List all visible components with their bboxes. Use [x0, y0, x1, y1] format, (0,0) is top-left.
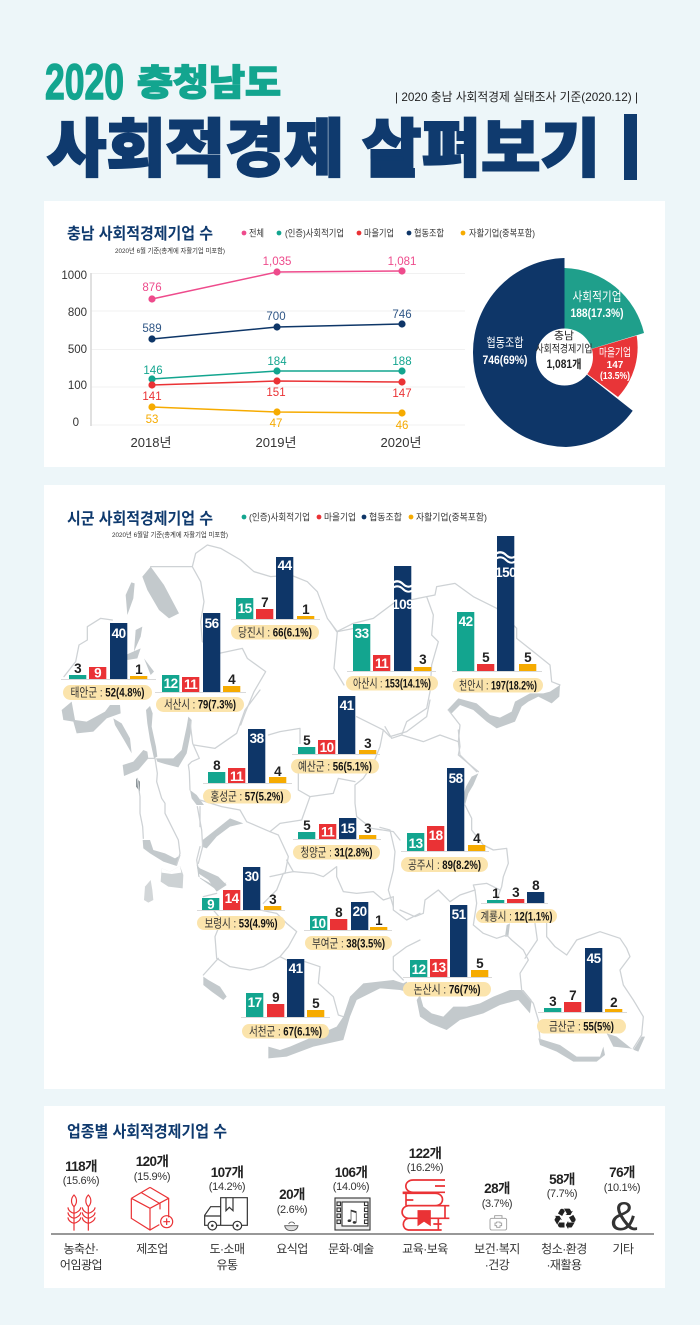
bars: 18 [429, 828, 444, 843]
category label [474, 1242, 520, 1272]
y axis labels: 800 [68, 307, 87, 319]
legend [242, 512, 487, 524]
bars [410, 905, 488, 977]
bars: 40 [112, 626, 126, 641]
bars: 3 [74, 661, 82, 676]
title line 2: 사회적경제 살펴보기 [47, 115, 636, 185]
district: 공주시 [401, 768, 489, 872]
district: 금산군 [537, 948, 627, 1034]
icon: wheat [68, 1195, 95, 1231]
y axis labels: 500 [68, 344, 87, 356]
label pill: 당진시 : 66(6.1%) [238, 626, 312, 640]
pie center label: 충남 [554, 330, 574, 342]
category: 교육·보육 [402, 1146, 449, 1256]
category label: 제조업 [136, 1242, 168, 1256]
bars: 8 [213, 758, 221, 773]
category: 요식업: 20개 [279, 1187, 305, 1202]
series: 자활기업: 53 [146, 414, 158, 426]
bars: 3 [364, 736, 372, 751]
pie chart [473, 258, 644, 447]
series: 자활기업: 47 [270, 418, 282, 430]
category label: 도·소매 [209, 1242, 245, 1256]
category: 도·소매 유통 [205, 1165, 247, 1272]
category label [209, 1242, 245, 1272]
series: 전체: 1,081 [388, 256, 416, 268]
category: 제조업 [131, 1154, 173, 1256]
pie label: 마을기업 [599, 346, 631, 382]
pie label: 마을기업: (13.5%) [600, 371, 630, 382]
label pill: 계룡시 : 12(1.1%) [480, 910, 552, 924]
category label: 농축산· [63, 1242, 99, 1256]
bars: 11 [184, 677, 198, 692]
pie label: 협동조합: 746(69%) [482, 355, 528, 367]
bars [298, 696, 376, 755]
category: 도·소매 유통: 107개 [211, 1165, 243, 1180]
legend [242, 228, 535, 240]
bars [407, 768, 485, 851]
series: 협동조합 [142, 309, 412, 343]
heading: 업종별 사회적경제기업 수 [67, 1123, 227, 1141]
pie label: 사회적기업 [570, 290, 624, 320]
category: 도·소매 유통: (14.2%) [209, 1181, 245, 1193]
title line 1: 2020 충청남도: 충청남도 [137, 62, 281, 103]
note: 2020년 6월 기준(총계에 자활기업 미포함) [115, 246, 225, 255]
bars: 4 [274, 764, 282, 779]
bars: 44 [278, 558, 293, 573]
bars: 3 [512, 885, 520, 900]
legend: (인증)사회적기업 [285, 228, 344, 240]
district: 아산시 [346, 566, 438, 690]
label pill: 서산시 : 79(7.3%) [164, 698, 236, 712]
bars: 1 [302, 602, 310, 617]
category: 문화·예술: (14.0%) [333, 1181, 369, 1193]
category label: 청소·환경 [541, 1242, 587, 1256]
bars: 12 [412, 962, 426, 977]
label pill: 천안시 : 197(18.2%) [459, 678, 537, 692]
bars: 20 [353, 904, 367, 919]
pie center label [536, 330, 592, 371]
bars: 4 [473, 831, 481, 846]
legend: 전체 [249, 228, 264, 240]
series: 사회적기업 [143, 356, 412, 383]
category: 교육·보육: (16.2%) [407, 1162, 443, 1174]
series: 자활기업 [146, 403, 408, 432]
label pill: 아산시 : 153(14.1%) [353, 676, 431, 690]
bars: 56 [205, 616, 220, 631]
bars [162, 613, 240, 692]
bars [487, 878, 544, 903]
bars: 45 [587, 951, 602, 966]
bars: 13 [409, 836, 424, 851]
series: 전체 [142, 256, 416, 303]
label pill: 청양군 : 31(2.8%) [300, 846, 372, 860]
bars: 11 [375, 656, 389, 671]
pie label: 사회적기업: 188(17.3%) [570, 308, 624, 320]
pie label: 마을기업: 147 [607, 360, 624, 371]
series: 사회적기업: 184 [267, 356, 287, 368]
category: 보건·복지·건강 [474, 1181, 520, 1272]
bars: 11 [230, 769, 244, 784]
bars: 1 [375, 913, 383, 928]
label pill: 보령시 : 53(4.9%) [204, 916, 278, 930]
bars: 14 [225, 891, 240, 906]
bars: 5 [303, 733, 311, 748]
bars: 1 [492, 886, 500, 901]
bars: 5 [476, 956, 484, 971]
icon: film and music: ♫ [344, 1207, 360, 1227]
legend: 자활기업(중복포함) [416, 512, 487, 524]
x axis labels: 2020년 [381, 435, 421, 450]
label pill: 금산군 : 55(5%) [549, 1020, 614, 1034]
legend: 마을기업 [364, 228, 394, 240]
bars: 11 [321, 824, 335, 840]
bars: 150 [495, 565, 516, 580]
bars [544, 948, 622, 1012]
line chart [61, 256, 465, 450]
district: 청양군 [293, 818, 381, 860]
series: 전체: 876 [142, 282, 162, 294]
category: 보건·복지·건강: 28개 [484, 1181, 510, 1196]
icon: ampersand: & [610, 1193, 638, 1239]
bars: 9 [94, 666, 101, 680]
category label [541, 1242, 587, 1272]
district: 부여군 [304, 902, 392, 950]
category label: 유통 [216, 1258, 238, 1272]
icon: truck [205, 1198, 247, 1230]
label pill: 예산군 : 56(5.1%) [298, 760, 372, 774]
panel: 충남 사회적경제기업 수 [44, 201, 665, 467]
category: 제조업: (15.9%) [134, 1171, 170, 1183]
bars: 7 [569, 988, 576, 1003]
bars: 4 [228, 672, 236, 687]
pie label: 마을기업: 마을기업 [599, 346, 631, 359]
title line 1: 2020 충청남도 [45, 54, 281, 110]
bars: 5 [303, 818, 311, 833]
note: 2020년 6월말 기준(총계에 자활기업 미포함) [112, 530, 228, 539]
y axis labels [61, 270, 87, 429]
bars: 1 [135, 662, 143, 677]
category: 교육·보육: 122개 [409, 1146, 441, 1161]
district: 홍성군 [203, 729, 292, 804]
series: 사회적기업: 188 [392, 356, 412, 368]
district: 천안시 [452, 536, 543, 692]
x axis labels: 2018년 [131, 435, 171, 450]
category label: 보건·복지 [474, 1242, 520, 1256]
category: 제조업: 120개 [136, 1154, 168, 1169]
title line 2: 사회적경제 살펴보기: 사회적경제 [47, 115, 344, 185]
bars: 8 [532, 878, 540, 893]
heading: 충남 사회적경제기업 수 [67, 225, 213, 243]
bars: 9 [272, 990, 279, 1005]
bars: 17 [248, 995, 262, 1010]
panel: 업종별 사회적경제기업 수 [44, 1106, 665, 1288]
bars: 9 [207, 897, 214, 912]
district: 보령시 [197, 867, 285, 930]
label pill: 논산시 : 76(7%) [414, 982, 480, 996]
icon: box [131, 1187, 173, 1230]
category label: ·건강 [485, 1258, 510, 1272]
category: 기타: 76개 [609, 1165, 635, 1180]
bars: 3 [364, 821, 372, 836]
bars: 58 [449, 771, 464, 786]
bars: 12 [164, 676, 178, 691]
bars [298, 818, 376, 840]
district: 당진시 [231, 557, 320, 640]
bars: 13 [432, 960, 447, 975]
category: 기타 [604, 1165, 640, 1256]
bars: 109 [392, 597, 413, 612]
panel: 시군 사회적경제기업 수 [44, 485, 665, 1089]
series: 전체: 1,035 [263, 256, 291, 268]
category: 청소·환경·재활용: (7.7%) [547, 1188, 577, 1200]
y axis labels: 100 [68, 380, 87, 392]
bars: 41 [289, 961, 304, 976]
bars: 3 [549, 994, 557, 1009]
map of Chungnam [62, 545, 645, 1062]
series: 사회적기업: 146 [143, 365, 163, 377]
category: 요식업 [276, 1187, 308, 1256]
bars: 33 [355, 626, 370, 641]
title line 1: 2020 충청남도: 2020 [45, 54, 124, 110]
icon: medical kit [490, 1216, 507, 1230]
bars [236, 557, 314, 619]
bars: 15 [238, 601, 253, 616]
category: 기타: (10.1%) [604, 1182, 640, 1194]
category label: ·재활용 [546, 1258, 582, 1272]
pie center label: 1,081개 [546, 358, 582, 371]
series: 협동조합: 589 [142, 323, 162, 335]
series: 자활기업: 46 [396, 420, 408, 432]
category label [60, 1242, 102, 1272]
category label: 교육·보육 [402, 1242, 448, 1256]
category: 농축산·어임광업 [60, 1159, 102, 1272]
pie label: 사회적기업: 사회적기업 [572, 290, 622, 304]
bars: 10 [320, 740, 334, 755]
legend: 자활기업(중복포함) [469, 228, 535, 240]
survey basis note: | 2020 충남 사회적경제 실태조사 기준(2020.12) | [395, 90, 638, 104]
category label: 기타 [612, 1242, 634, 1256]
bars [353, 566, 431, 671]
icon: bowl [285, 1222, 298, 1231]
legend: 마을기업 [324, 512, 356, 524]
district: 계룡시 [476, 878, 557, 924]
bars: 42 [459, 614, 473, 629]
x axis labels: 2019년 [256, 435, 296, 450]
legend: 협동조합 [369, 512, 402, 524]
series: 협동조합: 746 [392, 309, 412, 321]
x axis labels [131, 435, 421, 450]
category: 보건·복지·건강: (3.7%) [482, 1198, 512, 1210]
legend: (인증)사회적기업 [249, 512, 310, 524]
baseline [51, 1233, 654, 1235]
bars: 41 [340, 698, 355, 713]
category: 농축산·어임광업: 118개 [65, 1159, 97, 1174]
bars: 2 [610, 995, 617, 1010]
bars: 15 [341, 821, 356, 836]
district: 서천군 [241, 959, 330, 1038]
bars: 51 [452, 907, 467, 922]
bars [457, 536, 536, 671]
pie label: 협동조합: 협동조합 [486, 336, 524, 350]
series: 협동조합: 700 [266, 311, 286, 323]
label pill: 공주시 : 89(8.2%) [408, 858, 481, 872]
pie label: 협동조합 [482, 336, 528, 367]
category: 문화·예술 [328, 1165, 374, 1256]
series: 마을기업: 147 [392, 388, 412, 400]
label pill: 홍성군 : 57(5.2%) [210, 790, 284, 804]
series: 마을기업: 141 [142, 391, 162, 403]
category: 문화·예술: 106개 [335, 1165, 367, 1180]
icon: stacked books [402, 1180, 449, 1230]
category: 청소·환경·재활용: 58개 [549, 1172, 575, 1187]
y axis labels: 1000 [61, 270, 87, 282]
bars [208, 729, 286, 784]
category: 농축산·어임광업: (15.6%) [63, 1175, 99, 1187]
bars: 38 [250, 731, 265, 746]
bars [310, 902, 387, 931]
bars: 3 [419, 652, 427, 667]
header title [45, 54, 638, 185]
title line 2: 사회적경제 살펴보기: 살펴보기 [362, 115, 600, 185]
label pill: 서천군 : 67(6.1%) [249, 1024, 322, 1038]
bars: 5 [482, 650, 490, 665]
bars: 7 [261, 595, 268, 610]
series: 마을기업 [142, 377, 412, 403]
bars: 5 [524, 650, 532, 665]
bars: 5 [312, 996, 320, 1011]
bars: 10 [312, 916, 326, 931]
district: 태안군 [61, 623, 156, 700]
legend: 협동조합 [414, 228, 444, 240]
icon: recycle: ♻ [552, 1202, 578, 1236]
pie center label: 사회적경제기업 [536, 342, 592, 355]
bars: 8 [335, 905, 343, 920]
district: 예산군 [291, 696, 380, 774]
series: 마을기업: 151 [266, 387, 286, 399]
district: 논산시 [403, 905, 492, 996]
bars: 30 [245, 869, 259, 884]
label pill: 태안군 : 52(4.8%) [70, 686, 144, 700]
district: 서산시 [155, 613, 246, 712]
label pill: 부여군 : 38(3.5%) [312, 936, 385, 950]
bars [202, 867, 281, 912]
category label: 문화·예술 [328, 1242, 374, 1256]
heading: 시군 사회적경제기업 수 [67, 510, 213, 528]
category label: 요식업 [276, 1242, 308, 1256]
y axis labels: 0 [73, 417, 79, 429]
bars [69, 623, 147, 680]
bars [246, 959, 324, 1017]
category: 청소·환경·재활용 [541, 1172, 587, 1272]
bars: 3 [269, 892, 277, 907]
category: 요식업: (2.6%) [277, 1204, 307, 1216]
category label: 어임광업 [60, 1258, 102, 1272]
